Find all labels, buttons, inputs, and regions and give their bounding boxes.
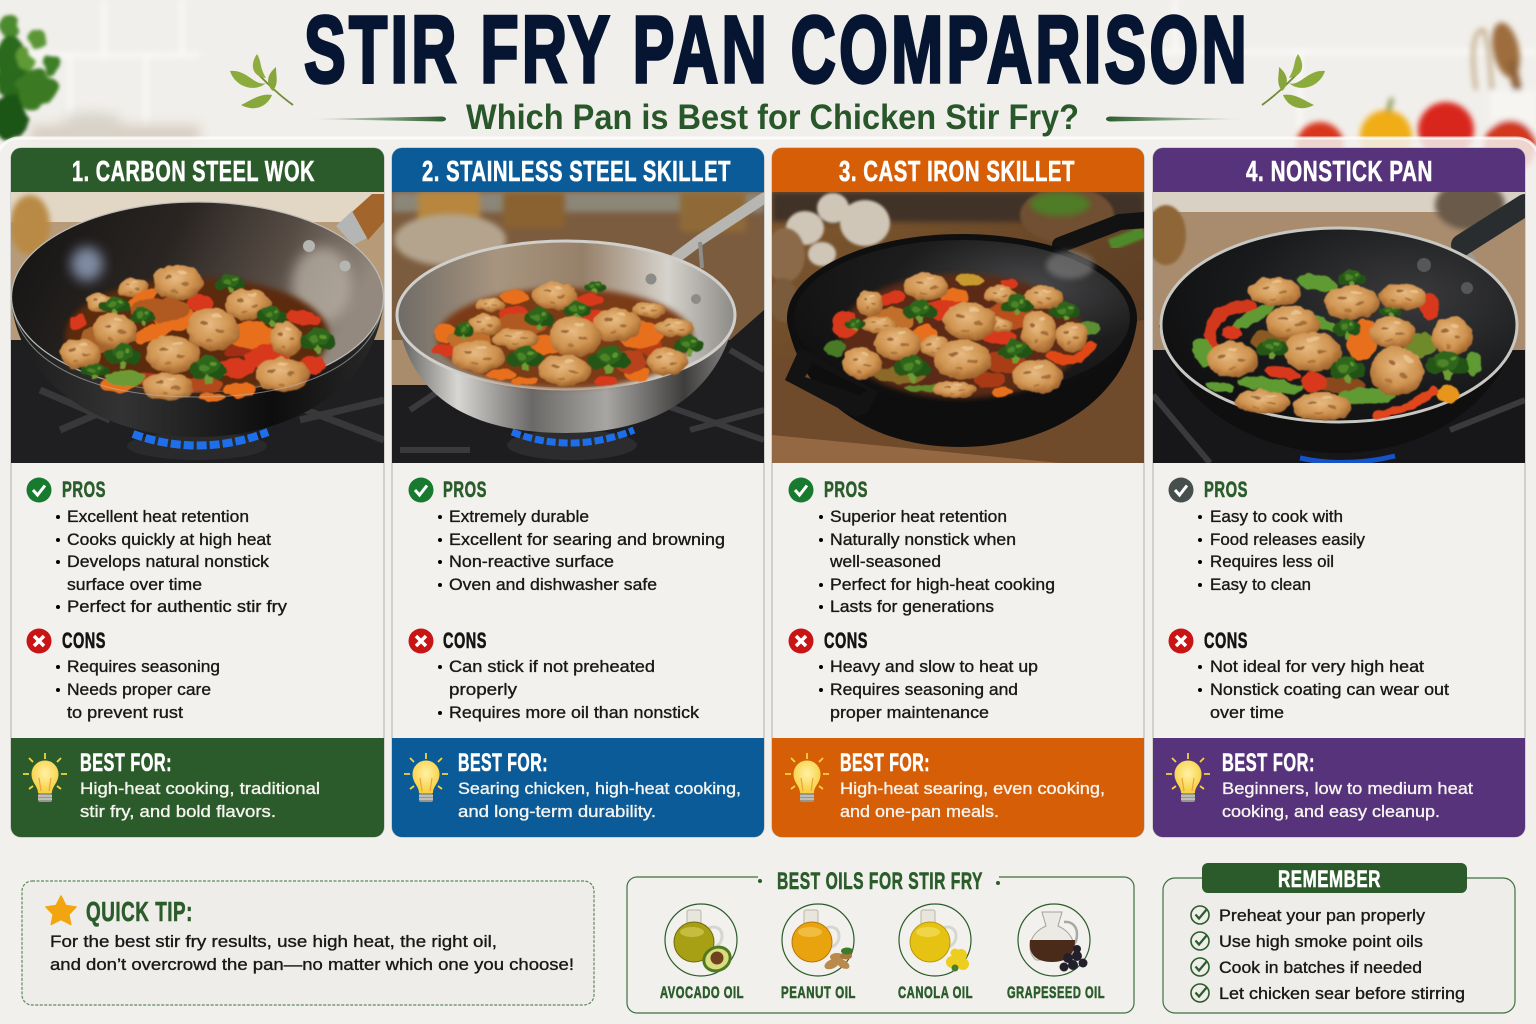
best for: cast iron skillet: and one-pan meals. — [840, 802, 999, 821]
cons: stainless steel skillet — [408, 628, 700, 722]
best for: carbon steel wok — [11, 738, 384, 837]
kitchen backdrop: right — [1140, 0, 1536, 172]
cons: stainless steel skillet: properly — [449, 680, 518, 699]
panel: cast iron skillet — [765, 148, 1144, 837]
subtitle: Which Pan is Best for Chicken Stir Fry? — [466, 98, 1079, 137]
cons: nonstick pan — [1168, 628, 1449, 722]
pros: stainless steel skillet: PROS — [443, 477, 487, 502]
icon: left herb sprig — [230, 54, 293, 108]
quick tip heading: QUICK TIP: — [86, 896, 193, 927]
cons: carbon steel wok: to prevent rust — [67, 703, 183, 722]
quick tip box — [22, 881, 594, 1005]
cons: stainless steel skillet: Can stick if not preheated — [449, 657, 655, 676]
remember heading — [1202, 863, 1467, 893]
kitchen backdrop: left — [0, 0, 200, 145]
quick tip text: For the best stir fry results, use high heat, the right oil, — [50, 932, 497, 951]
pros: carbon steel wok: Perfect for authentic stir fry — [67, 597, 288, 616]
header: carbon steel wok — [11, 148, 384, 192]
oil: grapeseed — [1007, 904, 1105, 1002]
cons: stainless steel skillet: Requires more oil than nonstick — [449, 703, 700, 722]
panel: stainless steel skillet — [392, 148, 764, 837]
cons: cast iron skillet: proper maintenance — [830, 703, 989, 722]
remember checklist: Cook in batches if needed — [1219, 958, 1422, 977]
best for: stainless steel skillet: Searing chicken, high-heat cooking, — [458, 779, 741, 798]
photo: cast iron skillet on wooden board — [765, 187, 1144, 463]
panel: carbon steel wok — [10, 148, 384, 837]
photo: carbon steel wok over gas burner — [10, 192, 384, 463]
cons: cast iron skillet: Heavy and slow to heat up — [830, 657, 1038, 676]
pros: stainless steel skillet — [408, 477, 725, 594]
header: nonstick pan — [1153, 148, 1525, 192]
pros: nonstick pan — [1168, 477, 1365, 594]
pros: cast iron skillet — [788, 477, 1055, 616]
oil: peanut — [781, 904, 856, 1002]
best for: carbon steel wok: stir fry, and bold flavors. — [80, 802, 276, 821]
header: carbon steel wok: 1. CARBON STEEL WOK — [72, 156, 315, 188]
pros: carbon steel wok: Excellent heat retention — [67, 507, 249, 526]
pros: stainless steel skillet: Excellent for searing and browning — [449, 530, 725, 549]
pros: carbon steel wok: surface over time — [67, 575, 202, 594]
header: cast iron skillet: 3. CAST IRON SKILLET — [839, 156, 1075, 188]
pros: stainless steel skillet: Oven and dishwasher safe — [449, 575, 657, 594]
oil: peanut: PEANUT OIL — [781, 983, 856, 1002]
header: stainless steel skillet — [392, 148, 764, 192]
pros: carbon steel wok — [26, 477, 288, 616]
cons: carbon steel wok: Requires seasoning — [67, 657, 220, 676]
best oils heading: BEST OILS FOR STIR FRY — [777, 868, 983, 895]
best for: stainless steel skillet — [392, 738, 764, 837]
oil: canola: CANOLA OIL — [898, 983, 973, 1002]
cons: carbon steel wok: CONS — [62, 628, 106, 653]
pros: nonstick pan: Easy to cook with — [1210, 507, 1343, 526]
remember checklist: Let chicken sear before stirring — [1219, 984, 1465, 1003]
subtitle rule right — [1106, 116, 1245, 122]
pros: nonstick pan: Easy to clean — [1210, 575, 1311, 594]
cons: stainless steel skillet: CONS — [443, 628, 487, 653]
pros: carbon steel wok: Develops natural nonstick — [67, 552, 270, 571]
pros: nonstick pan: PROS — [1204, 477, 1248, 502]
best for: nonstick pan — [1153, 738, 1525, 837]
remember checklist — [1191, 906, 1465, 1003]
pros: nonstick pan: Food releases easily — [1210, 530, 1365, 549]
cons: cast iron skillet: Requires seasoning and — [830, 680, 1018, 699]
remember heading: REMEMBER — [1278, 866, 1381, 893]
cons: cast iron skillet: CONS — [824, 628, 868, 653]
cons: nonstick pan: Not ideal for very high heat — [1210, 657, 1424, 676]
cons: nonstick pan: CONS — [1204, 628, 1248, 653]
header: stainless steel skillet: 2. STAINLESS STEEL SKILLET — [422, 156, 731, 188]
best for: stainless steel skillet: and long-term durability. — [458, 802, 656, 821]
pros: cast iron skillet: Lasts for generations — [830, 597, 994, 616]
pros: stainless steel skillet: Extremely durable — [449, 507, 589, 526]
pros: cast iron skillet: Superior heat retention — [830, 507, 1007, 526]
photo: nonstick pan on stovetop — [1146, 180, 1525, 463]
oil: grapeseed: GRAPESEED OIL — [1007, 983, 1105, 1002]
cons: nonstick pan: Nonstick coating can wear out — [1210, 680, 1449, 699]
best oils box — [627, 868, 1134, 1013]
pros: cast iron skillet: Perfect for high-heat cooking — [830, 575, 1055, 594]
pros: cast iron skillet: Naturally nonstick when — [830, 530, 1016, 549]
panel: nonstick pan — [1146, 148, 1525, 837]
quick tip text — [50, 932, 574, 974]
pros: cast iron skillet: well-seasoned — [829, 552, 941, 571]
best for: cast iron skillet: High-heat searing, even cooking, — [840, 779, 1105, 798]
best for: nonstick pan: cooking, and easy cleanup. — [1222, 802, 1440, 821]
best for: carbon steel wok: High-heat cooking, traditional — [80, 779, 320, 798]
header: cast iron skillet — [772, 148, 1144, 192]
icon: right herb sprig — [1262, 54, 1325, 108]
subtitle rule left — [308, 116, 446, 122]
cons: carbon steel wok — [26, 628, 220, 722]
remember checklist: Use high smoke point oils — [1219, 932, 1423, 951]
pros: carbon steel wok: Cooks quickly at high heat — [67, 530, 271, 549]
oil: avocado — [660, 904, 744, 1002]
best for: stainless steel skillet: BEST FOR: — [458, 749, 548, 777]
pros: carbon steel wok: PROS — [62, 477, 106, 502]
remember checklist: Preheat your pan properly — [1219, 906, 1426, 925]
oil: avocado: AVOCADO OIL — [660, 983, 744, 1002]
remember box — [1163, 863, 1515, 1013]
photo: stainless skillet over gas burner — [392, 192, 764, 463]
pros: cast iron skillet: PROS — [824, 477, 868, 502]
header: nonstick pan: 4. NONSTICK PAN — [1246, 156, 1433, 188]
best for: carbon steel wok: BEST FOR: — [80, 749, 172, 777]
best for: cast iron skillet: BEST FOR: — [840, 749, 930, 777]
quick tip text: and don’t overcrowd the pan—no matter which one you choose! — [50, 955, 574, 974]
pros: stainless steel skillet: Non-reactive surface — [449, 552, 614, 571]
icon: star — [46, 896, 76, 924]
cons: cast iron skillet — [788, 628, 1038, 722]
best for: nonstick pan: Beginners, low to medium heat — [1222, 779, 1473, 798]
pros: nonstick pan: Requires less oil — [1210, 552, 1334, 571]
best for: cast iron skillet — [772, 738, 1144, 837]
cons: nonstick pan: over time — [1210, 703, 1284, 722]
best for: nonstick pan: BEST FOR: — [1222, 749, 1315, 777]
oil: canola — [898, 904, 973, 1002]
cons: carbon steel wok: Needs proper care — [67, 680, 211, 699]
